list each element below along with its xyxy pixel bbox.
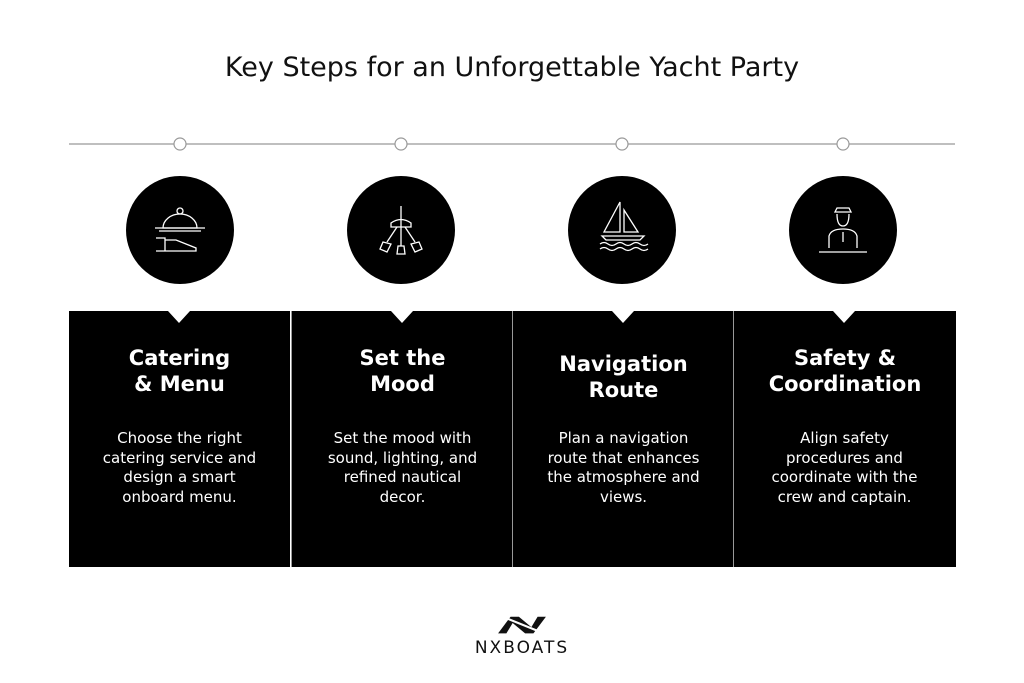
- title: Key Steps for an Unforgettable Yacht Party: [225, 52, 799, 83]
- panel: safety: [733, 311, 956, 567]
- panel: navigation: Route: [589, 378, 658, 402]
- panel: safety: Safety &: [794, 346, 896, 370]
- panel: mood: Set the: [360, 346, 445, 370]
- icon: sailboat: [568, 176, 676, 284]
- panel: safety: Coordination: [769, 372, 921, 396]
- logo: [475, 616, 569, 658]
- panel: mood: [291, 311, 513, 567]
- panel: mood: Set the mood with sound, lighting, and refined nautical decor.: [328, 429, 477, 506]
- timeline: [69, 137, 955, 151]
- icon: captain: [789, 176, 897, 284]
- icon: lights: [347, 176, 455, 284]
- panel: catering: & Menu: [134, 372, 225, 396]
- icon: catering cloche: [126, 176, 234, 284]
- panel: catering: [69, 311, 290, 567]
- panel: navigation: Navigation: [559, 352, 688, 376]
- panel: navigation: Plan a navigation route that enhances the atmosphere and views.: [547, 429, 700, 506]
- panel: mood: Mood: [370, 372, 435, 396]
- panel: catering: Choose the right catering service and design a smart onboard menu.: [103, 429, 256, 506]
- logo: NXBOATS: [475, 638, 569, 658]
- panel: navigation: [512, 311, 734, 567]
- panel: safety: Align safety procedures and coordinate with the crew and captain.: [772, 429, 917, 506]
- panel: catering: Catering: [129, 346, 230, 370]
